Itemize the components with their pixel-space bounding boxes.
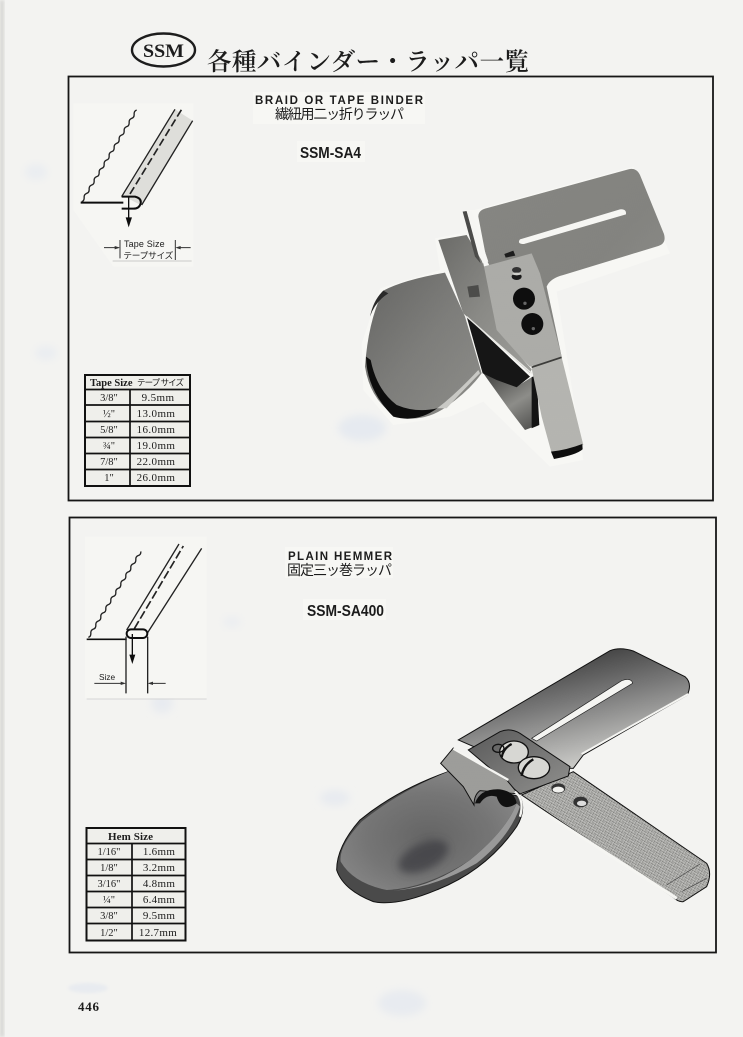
model number: SSM-SA4: SSM-SA4 [300,145,361,162]
table rows: 19.0mm [137,440,175,452]
table rows: ½" [103,409,115,420]
table rows: 3/8" [100,911,118,922]
title: 各種バインダー・ラッパ一覧 [207,48,529,76]
table rows: 3/16" [98,879,120,890]
table rows: 1/16" [98,847,120,858]
table rows: ¾" [103,441,115,452]
heading: braid or tape binder [253,92,425,124]
table header: Tape Size [90,378,133,389]
logo: SSM oval: SSM [143,41,184,62]
table header: Hem Size [108,831,153,843]
page number: 446 [78,999,100,1014]
label: tape size katakana: テープサイズ [123,249,174,260]
model number: SSM-SA400: SSM-SA400 [307,603,384,620]
table rows: 1.6mm [143,846,175,858]
table rows: 4.8mm [143,878,175,890]
table rows: 9.5mm [143,910,175,922]
table rows: 26.0mm [137,472,175,484]
table rows: ¼" [103,895,115,906]
table header [90,378,184,389]
table rows: 9.5mm [142,392,174,404]
diagram: hem size [85,537,207,699]
table: hem size [86,828,186,940]
panel: plain hemmer [70,518,716,952]
heading: braid or tape binder: 繊紐用二ッ折りラッパ [275,106,404,122]
logo: SSM oval [132,34,195,66]
table rows: 3/8" [100,393,118,404]
table rows: 16.0mm [137,424,175,436]
table rows: 6.4mm [143,894,175,906]
panel: braid or tape binder [68,76,713,500]
table header: テープ サイズ [137,378,184,388]
heading: braid or tape binder: BRAID OR TAPE BINDER [255,95,424,107]
table rows: 12.7mm [139,927,177,939]
label: size: Size [99,672,116,682]
table rows: 3.2mm [143,862,175,874]
heading: plain hemmer: PLAIN HEMMER [288,551,393,563]
table rows: 5/8" [100,425,118,436]
table rows: 22.0mm [137,456,175,468]
table: tape size [85,375,190,486]
table rows: 7/8" [100,457,118,468]
diagram: tape size [73,103,193,267]
table rows: 1/8" [100,863,118,874]
table rows: 1/2" [100,928,118,939]
photo: hemmer SSM-SA400 [337,649,710,903]
table rows [98,846,177,939]
label: tape size: Tape Size [124,239,165,249]
table rows [100,392,175,484]
photo: binder SSM-SA4 [362,167,670,467]
table rows: 13.0mm [137,408,175,420]
table rows: 1" [104,473,114,484]
heading: plain hemmer [285,547,393,578]
heading: plain hemmer: 固定三ッ巻ラッパ [287,562,392,578]
